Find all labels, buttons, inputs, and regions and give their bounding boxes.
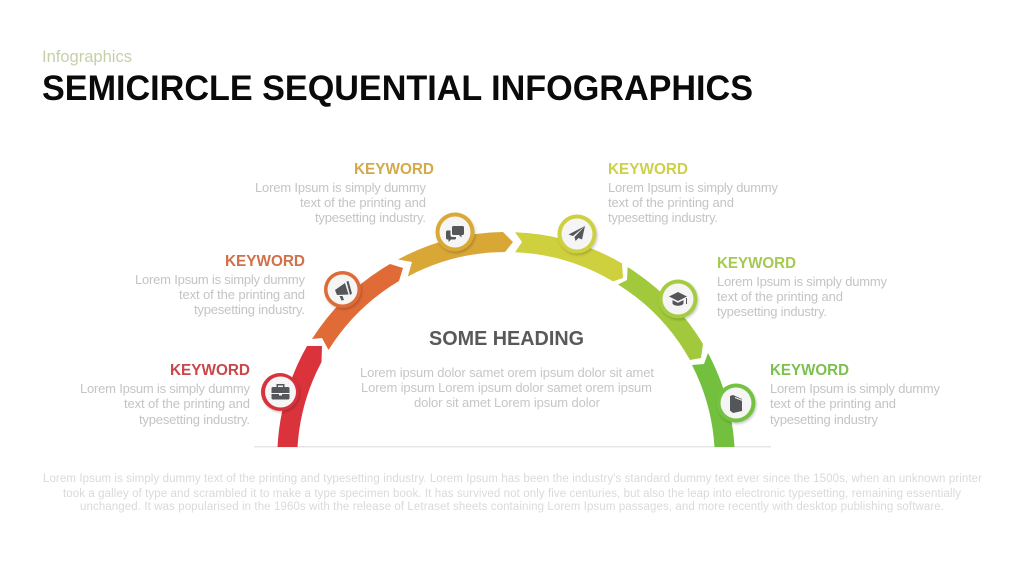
icon: book [716, 384, 756, 422]
icon: speech bubbles [436, 212, 474, 252]
segment 2: orange [312, 264, 403, 350]
text block: keyword gold: text of the printing and [300, 195, 426, 210]
text block: keyword green: Lorem Ipsum is simply dummy [770, 381, 940, 396]
segment 5: lime green [618, 267, 703, 360]
text block: keyword orange: KEYWORD [225, 253, 305, 270]
text block: keyword red: text of the printing and [124, 396, 250, 411]
text block: keyword orange: Lorem Ipsum is simply dummy [135, 272, 306, 287]
segment 3: gold [398, 232, 513, 276]
text block: keyword gold: Lorem Ipsum is simply dummy [255, 180, 426, 195]
center text: Lorem ipsum dolor samet orem ipsum dolor sit amet [360, 365, 654, 380]
segment 6: green [692, 353, 734, 447]
center text: Lorem ipsum Lorem ipsum dolor samet orem ipsum [361, 380, 652, 395]
text block: keyword red [80, 362, 250, 427]
text block: keyword green [770, 362, 940, 427]
icon: paper plane [558, 214, 596, 254]
center text [360, 365, 654, 410]
semicircle arrow chart [278, 232, 734, 447]
title: SEMICIRCLE SEQUENTIAL INFOGRAPHICS [42, 69, 753, 108]
eyebrow label: Infographics [42, 48, 132, 66]
footer paragraph: Lorem Ipsum is simply dummy text of the printing and typesetting industry. Lorem Ipsum has been the industry's standard dummy text ever since the 1500s, when an unknown printer [43, 473, 982, 485]
text block: keyword gold: KEYWORD [354, 161, 434, 178]
text block: keyword red: Lorem Ipsum is simply dummy [80, 381, 250, 396]
text block: keyword yellow: text of the printing and [608, 195, 734, 210]
text block: keyword lime: typesetting industry. [717, 304, 827, 319]
text block: keyword lime: text of the printing and [717, 289, 843, 304]
text block: keyword red: KEYWORD [170, 362, 250, 379]
baseline [254, 446, 771, 448]
text block: keyword yellow [608, 161, 778, 225]
footer paragraph: unchanged. It was popularised in the 1960s with the release of Letraset sheets containing Lorem Ipsum passages, and more recently with desktop publishing software. [80, 501, 944, 513]
text block: keyword yellow: Lorem Ipsum is simply dummy [608, 180, 778, 195]
footer paragraph: took a galley of type and scrambled it to make a type specimen book. It has survived not only five centuries, but also the leap into electronic typesetting, remaining essentially [63, 488, 961, 500]
center heading: SOME HEADING [429, 328, 584, 350]
text block: keyword yellow: KEYWORD [608, 161, 688, 178]
segment 4: yellow [515, 232, 623, 281]
text block: keyword green: typesetting industry [770, 412, 878, 427]
icon: graduation cap [658, 280, 698, 318]
text block: keyword lime [717, 255, 888, 319]
icon: briefcase [261, 373, 299, 411]
text block: keyword orange: typesetting industry. [194, 302, 305, 317]
text block: keyword lime: KEYWORD [717, 255, 796, 272]
text block: keyword lime: Lorem Ipsum is simply dummy [717, 274, 888, 289]
text block: keyword gold [255, 161, 434, 225]
segment 1: red [278, 346, 322, 447]
text block: keyword green: KEYWORD [770, 362, 849, 379]
text block: keyword red: typesetting industry. [139, 412, 250, 427]
text block: keyword green: text of the printing and [770, 396, 896, 411]
footer paragraph [43, 473, 982, 513]
text block: keyword orange [135, 253, 306, 317]
center text: dolor sit amet Lorem ipsum dolor [414, 395, 601, 410]
text block: keyword yellow: typesetting industry. [608, 210, 718, 225]
icon: megaphone [324, 271, 361, 308]
text block: keyword orange: text of the printing and [179, 287, 305, 302]
text block: keyword gold: typesetting industry. [315, 210, 426, 225]
